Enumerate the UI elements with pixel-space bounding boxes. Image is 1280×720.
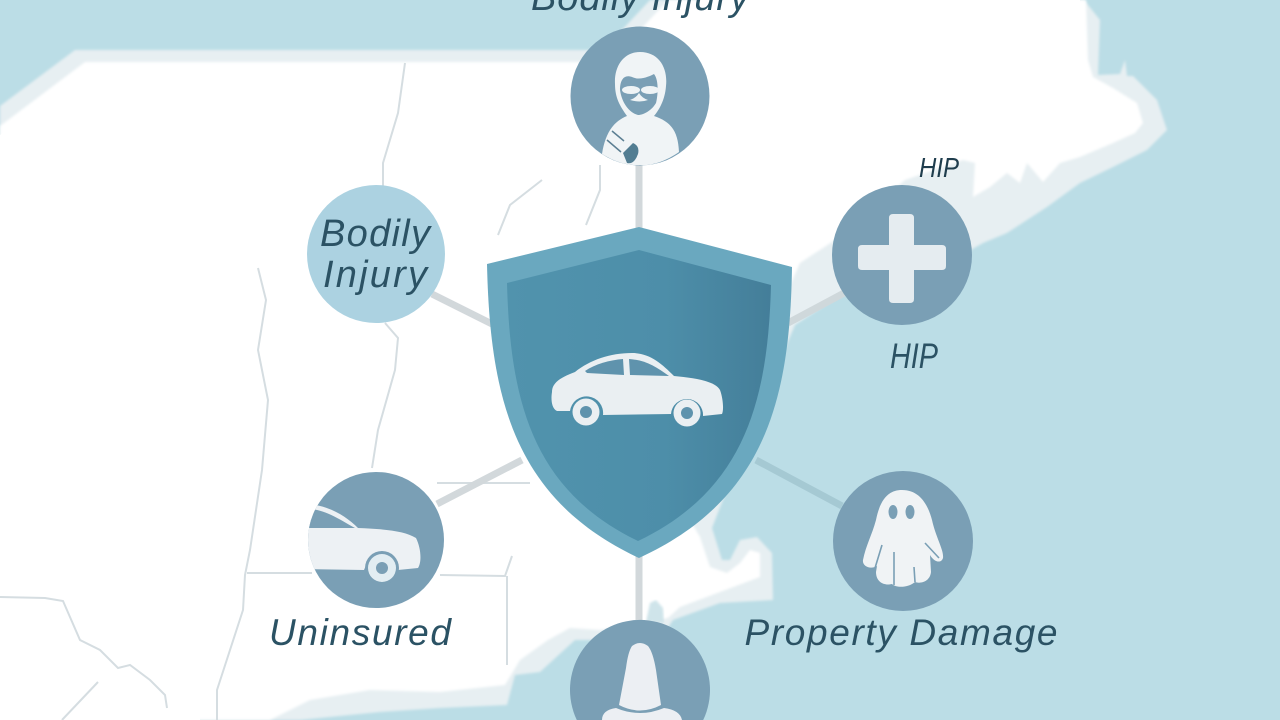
center shield with car (487, 227, 792, 558)
label: uninsured: Uninsured (269, 612, 452, 653)
icon: car (552, 353, 723, 426)
circle: uninsured (308, 472, 444, 608)
node: left bodily injury (307, 185, 445, 323)
label: bodily: Bodily (320, 213, 432, 255)
label: HIP top: HIP (919, 152, 959, 183)
circle: bodily injury (307, 185, 445, 323)
circle: HIP (832, 185, 972, 325)
node: top bodily injury (531, 0, 751, 166)
label: injury: Injury (323, 254, 429, 296)
label: HIP bottom: HIP (890, 337, 939, 376)
icon: partial car (308, 506, 420, 582)
label: property damage: Property Damage (744, 612, 1058, 653)
icon: medical cross (858, 214, 946, 303)
node: bottom cone (570, 620, 710, 720)
circle: bottom (570, 620, 710, 720)
icon: traffic cone (602, 643, 682, 720)
icon: ghost (863, 490, 943, 587)
node: property damage (744, 471, 1058, 653)
circle: property damage (833, 471, 973, 611)
map: inlet near south coast (646, 600, 664, 623)
connector lines (432, 160, 846, 625)
circle: top (570, 26, 710, 166)
node: HIP (832, 152, 972, 376)
icon: person (602, 52, 679, 165)
map: state border lines (0, 63, 600, 720)
node: uninsured (269, 472, 452, 653)
